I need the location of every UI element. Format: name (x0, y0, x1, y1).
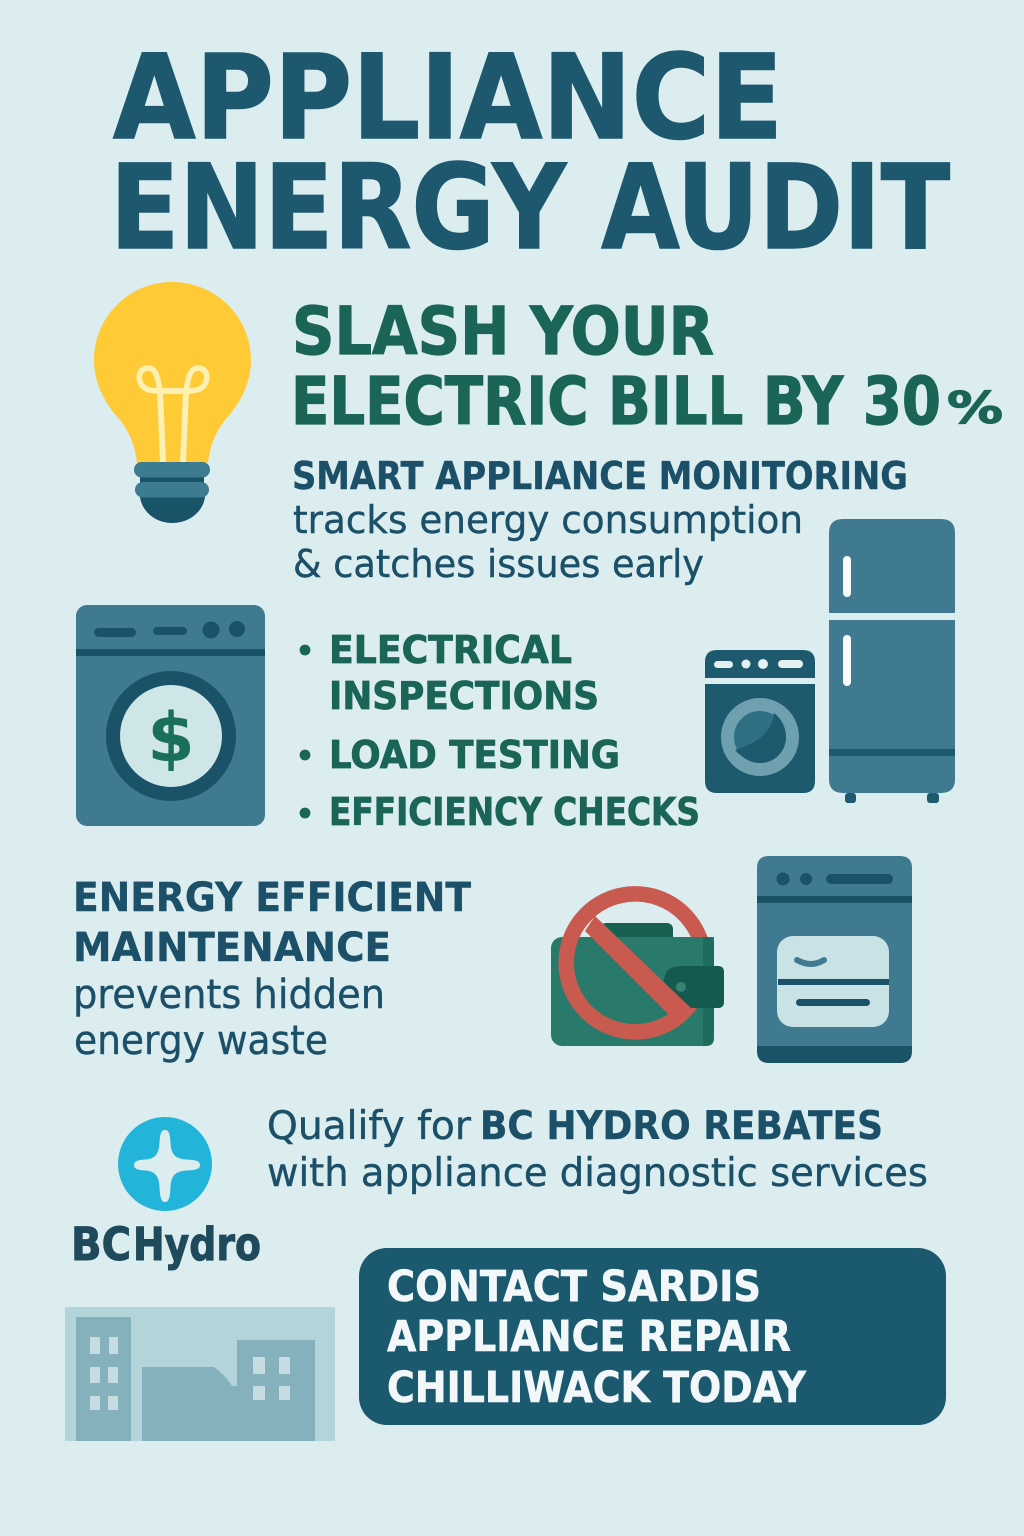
icon: BC Hydro logo (71, 1117, 261, 1271)
text block: smart appliance monitoring: SMART APPLIANCE MONITORING (292, 454, 908, 498)
text block: energy efficient maintenance: energy waste (74, 1018, 328, 1064)
icon: oven (757, 856, 912, 1063)
bullet list (300, 628, 700, 834)
bullet list: INSPECTIONS (329, 674, 599, 718)
icon: refrigerator (829, 519, 955, 803)
headline (291, 293, 1003, 440)
icon: BC Hydro logo: Hydro (133, 1218, 261, 1271)
text block: smart appliance monitoring: & catches issues early (293, 542, 704, 586)
icon: BC Hydro logo: BC (71, 1218, 131, 1271)
icon: small washer (705, 650, 815, 793)
text block: BC Hydro rebates: with appliance diagnostic services (267, 1151, 928, 1196)
headline: SLASH YOUR (292, 293, 714, 370)
text block: energy efficient maintenance: prevents hidden (73, 972, 385, 1018)
call to action: CONTACT SARDIS (387, 1262, 761, 1312)
text block: BC Hydro rebates (267, 1104, 928, 1196)
text block: energy efficient maintenance (73, 875, 472, 1064)
bullet list: LOAD TESTING (329, 733, 620, 777)
title: APPLIANCE (113, 29, 783, 166)
call to action: APPLIANCE REPAIR (387, 1312, 791, 1362)
text block: smart appliance monitoring (292, 454, 908, 586)
bullet list: EFFICIENCY CHECKS (329, 790, 700, 834)
call to action (359, 1248, 946, 1425)
icon: light bulb (94, 282, 251, 523)
headline: % (947, 383, 1003, 434)
icon: washer with dollar sign (76, 605, 265, 826)
text block: energy efficient maintenance: ENERGY EFFICIENT (73, 875, 472, 921)
icon: washer with dollar sign: $ (147, 699, 195, 778)
illustration: city skyline (65, 1307, 335, 1441)
text block: BC Hydro rebates: Qualify for (267, 1104, 472, 1149)
text block: BC Hydro rebates: BC HYDRO REBATES (480, 1104, 883, 1149)
bullet list: ELECTRICAL (329, 628, 572, 672)
text block: energy efficient maintenance: MAINTENANCE (73, 925, 391, 971)
title (110, 29, 950, 276)
icon: crossed-out wallet (551, 894, 724, 1046)
text block: smart appliance monitoring: tracks energy consumption (293, 498, 803, 542)
call to action: CHILLIWACK TODAY (387, 1363, 807, 1413)
